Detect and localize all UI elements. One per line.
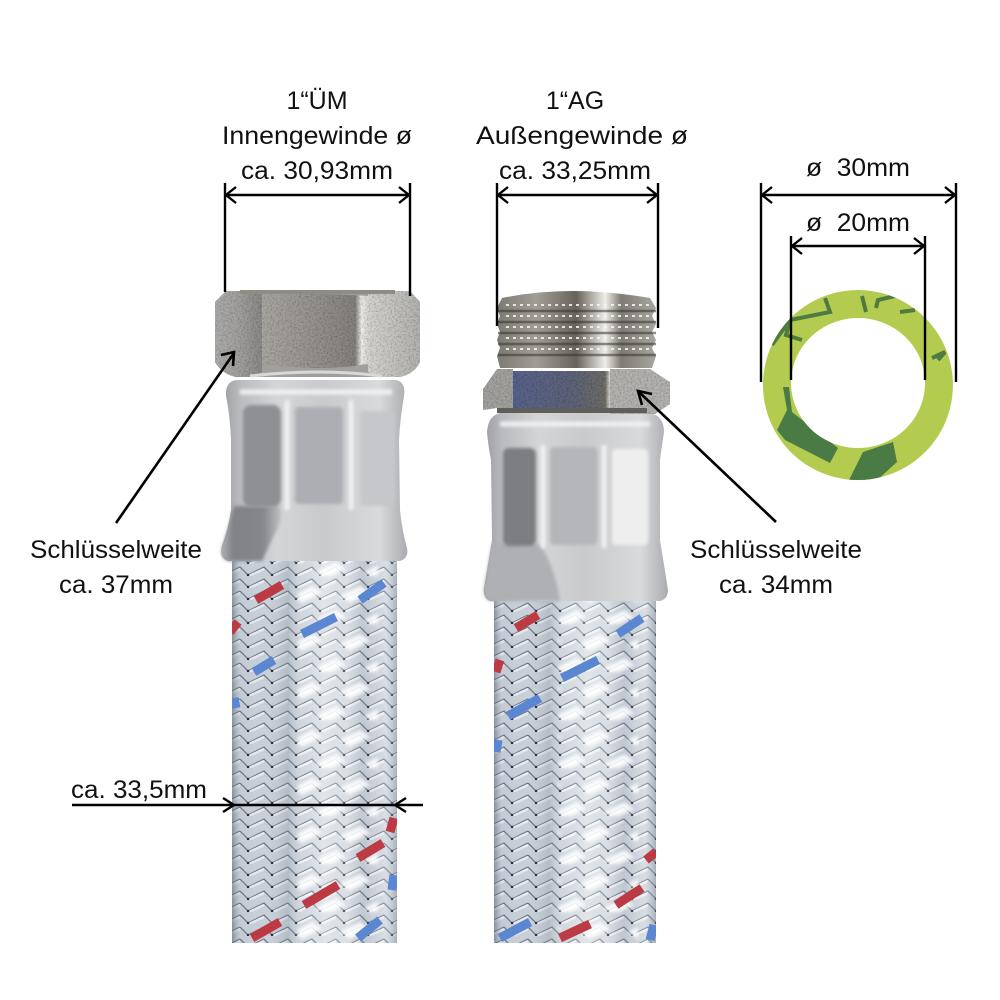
right fitting: male thread, hex and collar — [483, 291, 670, 601]
collar of right fitting — [484, 413, 668, 601]
dimension arrow: 30,93mm — [225, 183, 410, 296]
hex of right fitting — [483, 369, 670, 414]
label: ca. 30,93mm: ca. 30,93mm — [241, 157, 393, 185]
label: 1"ÜM: 1“ÜM — [286, 87, 348, 115]
gasket ring — [763, 290, 953, 482]
collar of left fitting — [221, 380, 407, 561]
arrow to right hex — [638, 391, 776, 522]
label: 20mm: ø 20mm — [806, 209, 910, 237]
hex nut of left fitting — [215, 290, 420, 377]
label: Innengewinde: Innengewinde ø — [222, 122, 412, 150]
callout: left wrench size — [30, 352, 234, 599]
external thread — [497, 291, 656, 368]
label: 1"AG: 1“AG — [546, 87, 604, 115]
left dimension: 1"ÜM — [222, 87, 412, 296]
arrow to left nut — [116, 352, 234, 523]
callout: hose diameter — [71, 776, 423, 812]
label: 30mm: ø 30mm — [806, 154, 910, 182]
label: Schlüsselweite left: Schlüsselweite — [30, 536, 202, 564]
dimension arrow: 33,25mm — [497, 183, 658, 328]
left fitting: hex union nut and collar — [215, 290, 420, 561]
right hose: braided steel — [494, 595, 656, 943]
label: ca. 33,5mm: ca. 33,5mm — [71, 776, 207, 804]
gasket printed marks — [772, 296, 945, 482]
label: ca. 34mm: ca. 34mm — [719, 571, 833, 599]
callout: right wrench size — [638, 391, 862, 599]
right dimension: 1"AG — [476, 87, 688, 328]
label: Schlüsselweite right: Schlüsselweite — [690, 536, 862, 564]
left hose: braided steel — [230, 555, 397, 943]
gasket dimensions — [761, 154, 956, 382]
hose diameter arrow — [72, 798, 423, 812]
label: ca. 37mm: ca. 37mm — [59, 571, 173, 599]
label: Außengewinde: Außengewinde ø — [476, 122, 688, 150]
dimension arrow: 30mm — [761, 183, 956, 382]
label: ca. 33,25mm: ca. 33,25mm — [499, 157, 651, 185]
dimension arrow: 20mm — [791, 236, 925, 380]
